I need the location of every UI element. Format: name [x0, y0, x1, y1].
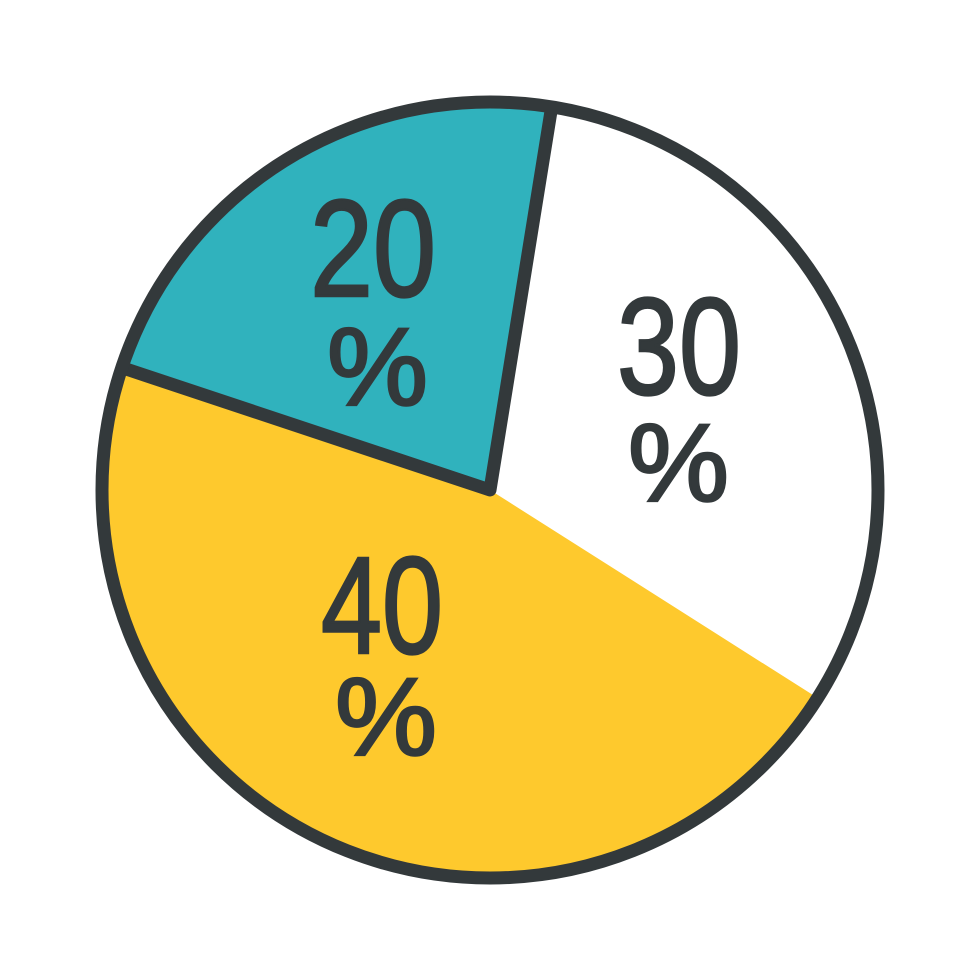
- label: 40%: [321, 529, 443, 779]
- label: 30%: 30: [617, 270, 741, 424]
- label: 40%: %: [335, 656, 437, 779]
- slice: teal 20%: [130, 108, 544, 482]
- slice dividers: [123, 105, 552, 490]
- circle outline: [102, 102, 878, 878]
- label: 20%: 20: [310, 172, 436, 326]
- label: 40%: 40: [321, 529, 443, 683]
- pie chart: [96, 96, 884, 884]
- label: 20%: %: [327, 306, 428, 429]
- label: 30%: [617, 270, 741, 525]
- slice: yellow 40%: [108, 376, 812, 872]
- label: 20%: [310, 172, 436, 429]
- label: 30%: %: [628, 402, 729, 525]
